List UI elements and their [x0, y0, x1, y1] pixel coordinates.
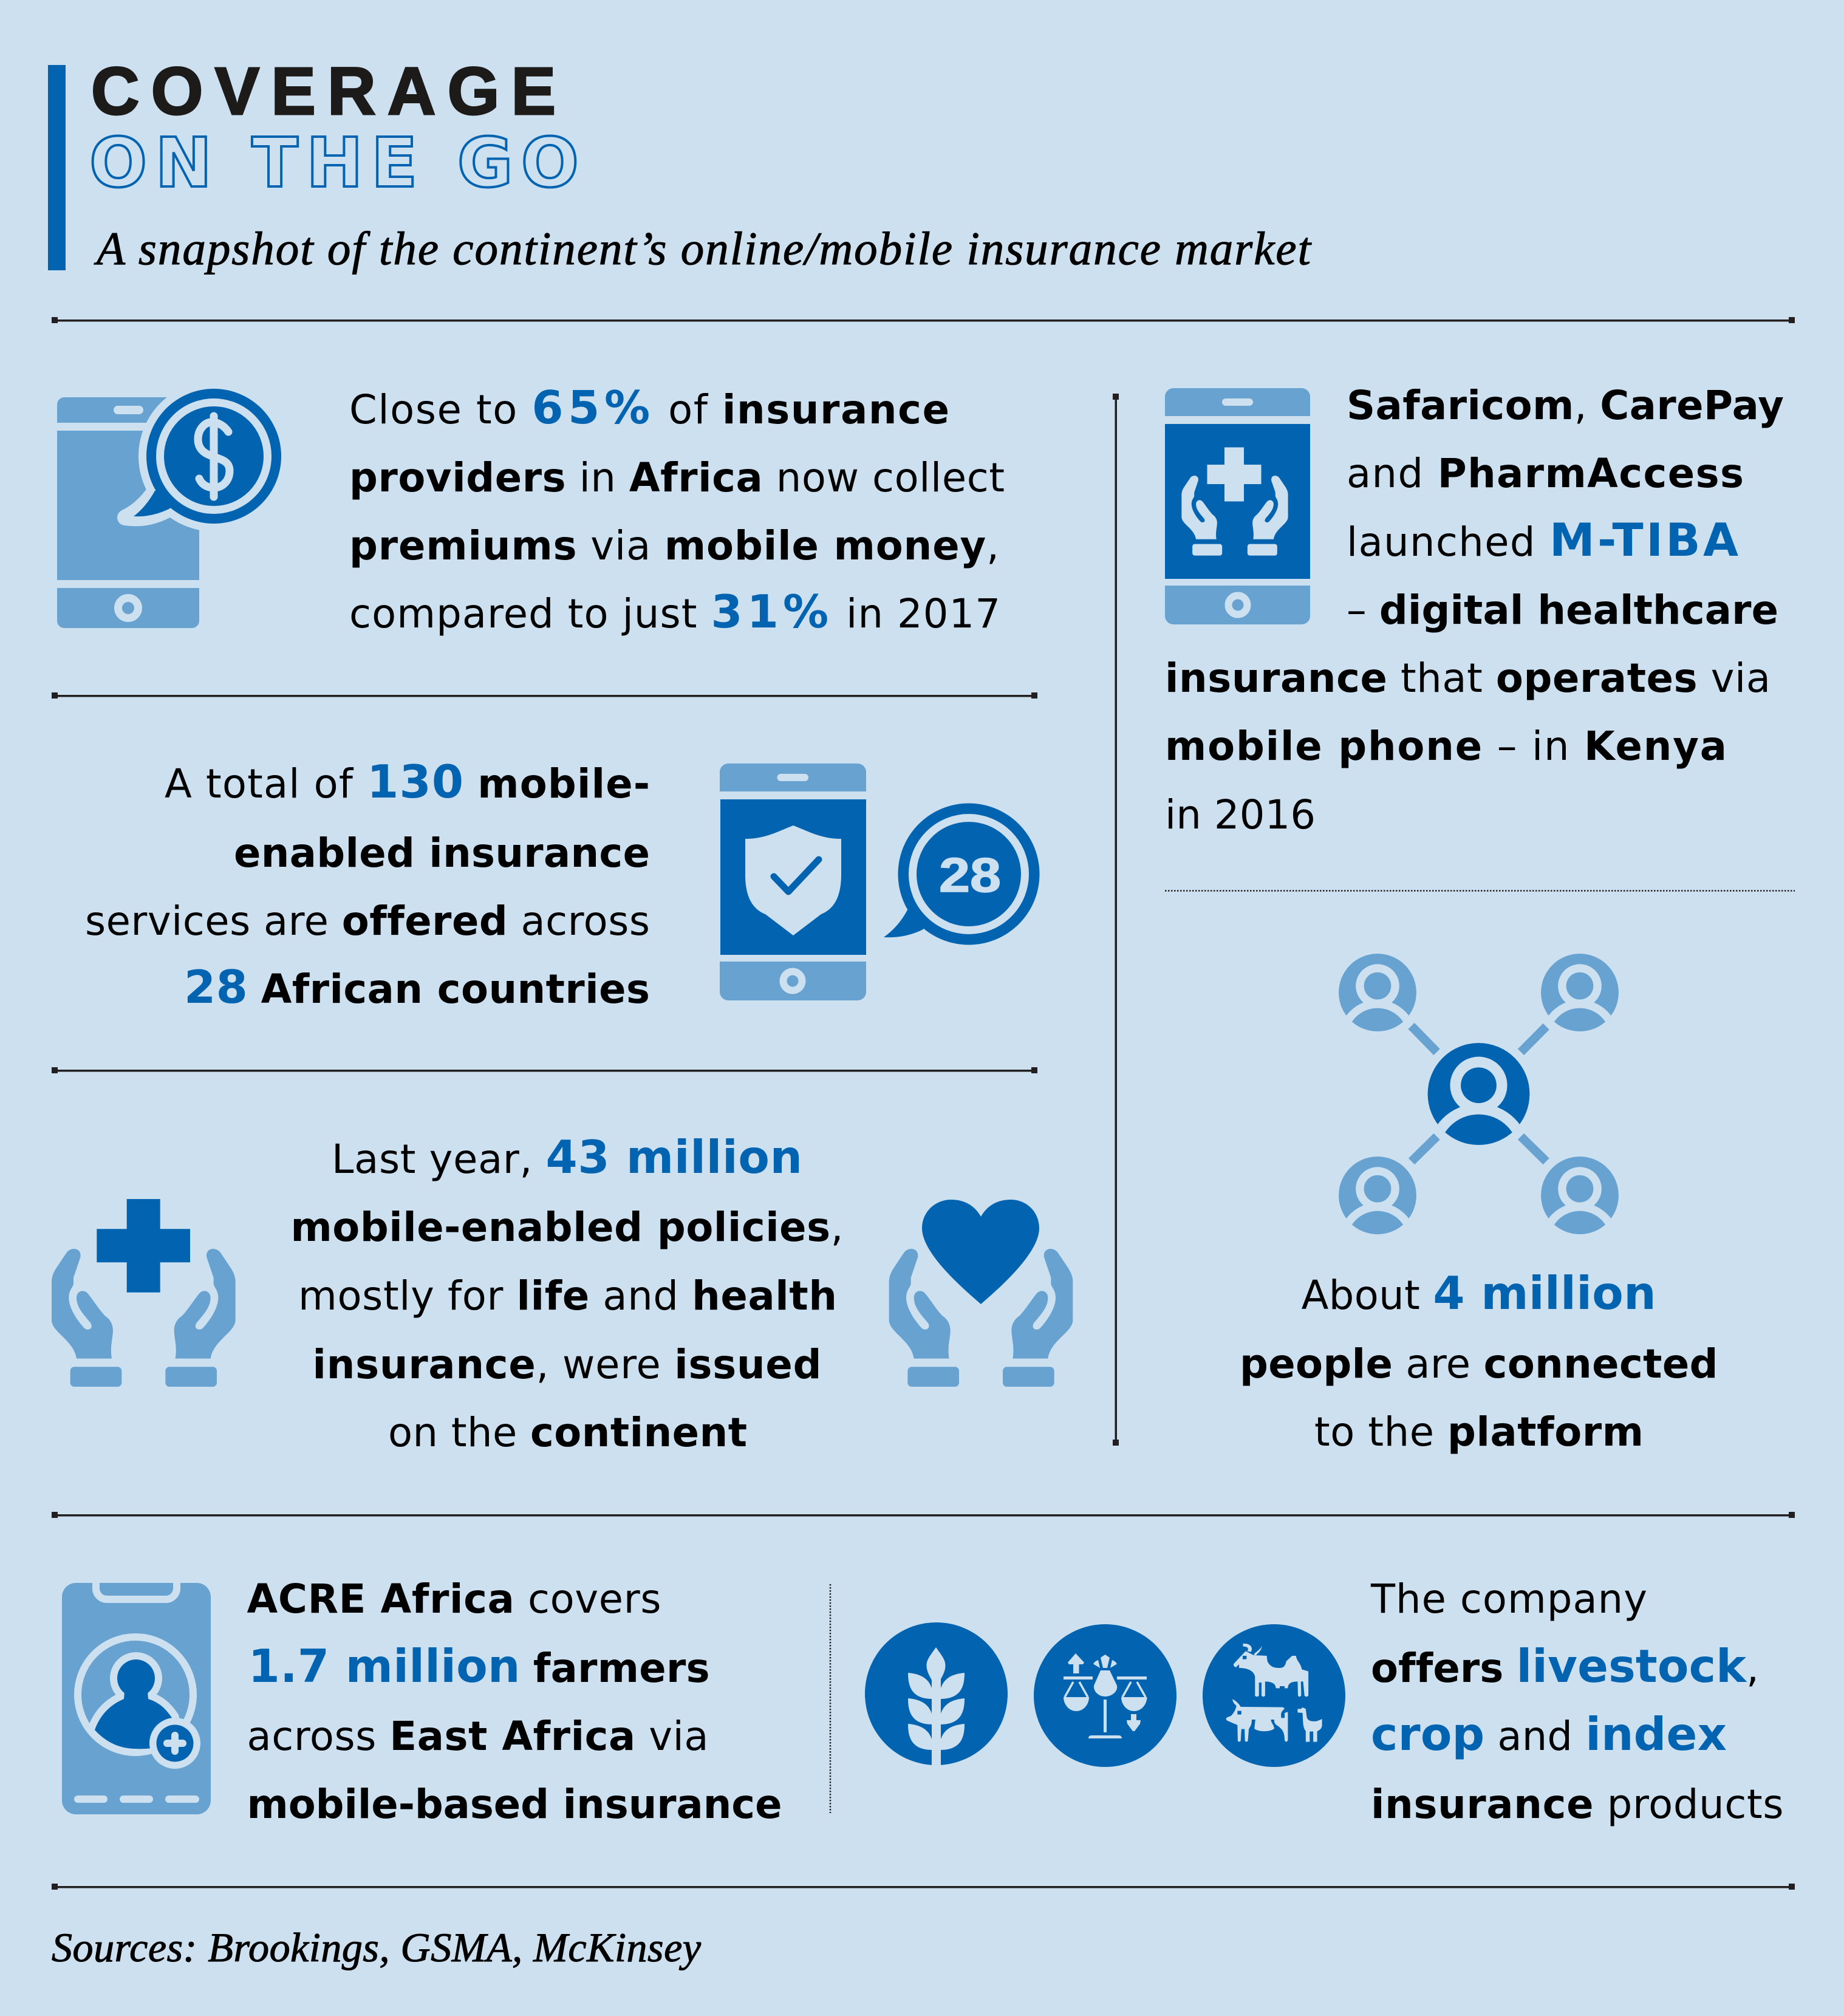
title: coverage: COVERAGE [91, 54, 556, 129]
icon: hands with cross [52, 1199, 236, 1387]
text: M-TIBA [1165, 383, 1784, 838]
icon: bubble 28 [884, 803, 1040, 945]
icon: phone with shield [720, 764, 866, 1000]
panel: insurance products [865, 1576, 1783, 1828]
text: 4 million: to the platform [1314, 1409, 1644, 1455]
text: M-TIBA: in 2016 [1165, 792, 1316, 838]
text: M-TIBA: – digital healthcare [1347, 587, 1778, 634]
text: 4 million: About 4 million [1302, 1266, 1656, 1320]
icon: livestock [1203, 1624, 1345, 1767]
panel: M-TIBA [1165, 383, 1784, 838]
text: M-TIBA: mobile phone – in Kenya [1165, 723, 1727, 770]
icon: phone with hands and cross [1165, 388, 1310, 624]
text: M-TIBA: launched M-TIBA [1347, 513, 1740, 567]
accent bar [48, 65, 66, 270]
sources: Sources: Brookings, GSMA, McKinsey [52, 1924, 702, 1970]
text: 130 services: enabled insurance [234, 830, 650, 876]
icon: phone with user [62, 1583, 211, 1814]
text: 43 million: on the continent [388, 1410, 747, 1456]
text: 65 percent: Close to 65% of insurance [349, 381, 949, 434]
icon: index scales [1034, 1624, 1176, 1767]
panel: mobile money premiums [57, 381, 1005, 638]
text: M-TIBA: and PharmAccess [1347, 451, 1744, 497]
text: 43 million: mostly for life and health [298, 1273, 837, 1319]
text: 43 million: mobile-enabled policies, [290, 1204, 843, 1251]
icon: hands with heart [889, 1200, 1073, 1387]
text: 65 percent: premiums via mobile money, [349, 523, 999, 569]
panel: 4 million people [1240, 954, 1718, 1455]
icon: user network [1339, 954, 1619, 1280]
text: 130 services: 28 African countries [184, 960, 650, 1014]
text: 65 percent: providers in Africa now collect [349, 455, 1005, 501]
text: ACRE Africa: across East Africa via [247, 1714, 708, 1760]
text: ACRE Africa: mobile-based insurance [247, 1782, 782, 1828]
header [48, 54, 1312, 275]
text: products: insurance products [1371, 1782, 1783, 1828]
text: 4 million [1240, 1266, 1718, 1455]
text: M-TIBA: Safaricom, CarePay [1347, 383, 1784, 429]
text: ACRE Africa: ACRE Africa covers [247, 1576, 661, 1622]
text: ACRE Africa: 1.7 million farmers [248, 1639, 710, 1693]
text: M-TIBA: insurance that operates via [1165, 655, 1771, 702]
icon: crop wheat [865, 1622, 1008, 1765]
panel: ACRE Africa [62, 1576, 782, 1828]
text: 43 million: insurance, were issued [312, 1342, 821, 1388]
text: 65 percent [349, 381, 1005, 638]
text: 43 million: Last year, 43 million [332, 1130, 802, 1184]
panel: 130 services [85, 755, 1040, 1014]
title: on the go: ON THE GO [89, 124, 579, 203]
text: 130 services: services are offered across [85, 898, 650, 945]
text: 130 services [85, 755, 650, 1014]
text: products: offers livestock, [1371, 1639, 1759, 1693]
text: products: crop and index [1371, 1707, 1727, 1761]
text: products [1370, 1576, 1783, 1828]
subtitle: A snapshot of the continent’s online/mobile insurance market [94, 222, 1312, 275]
text: 65 percent: compared to just 31% in 2017 [349, 585, 1000, 638]
text: 130 services: A total of 130 mobile- [165, 755, 650, 808]
icon: bubble 28: 28 [939, 848, 1001, 902]
text: 4 million: people are connected [1240, 1341, 1718, 1387]
icon: phone with dollar bubble [57, 381, 289, 628]
text: ACRE Africa [247, 1576, 782, 1828]
text: 43 million [290, 1130, 843, 1456]
panel: 43 million policies [52, 1130, 1073, 1456]
text: products: The company [1370, 1576, 1647, 1622]
